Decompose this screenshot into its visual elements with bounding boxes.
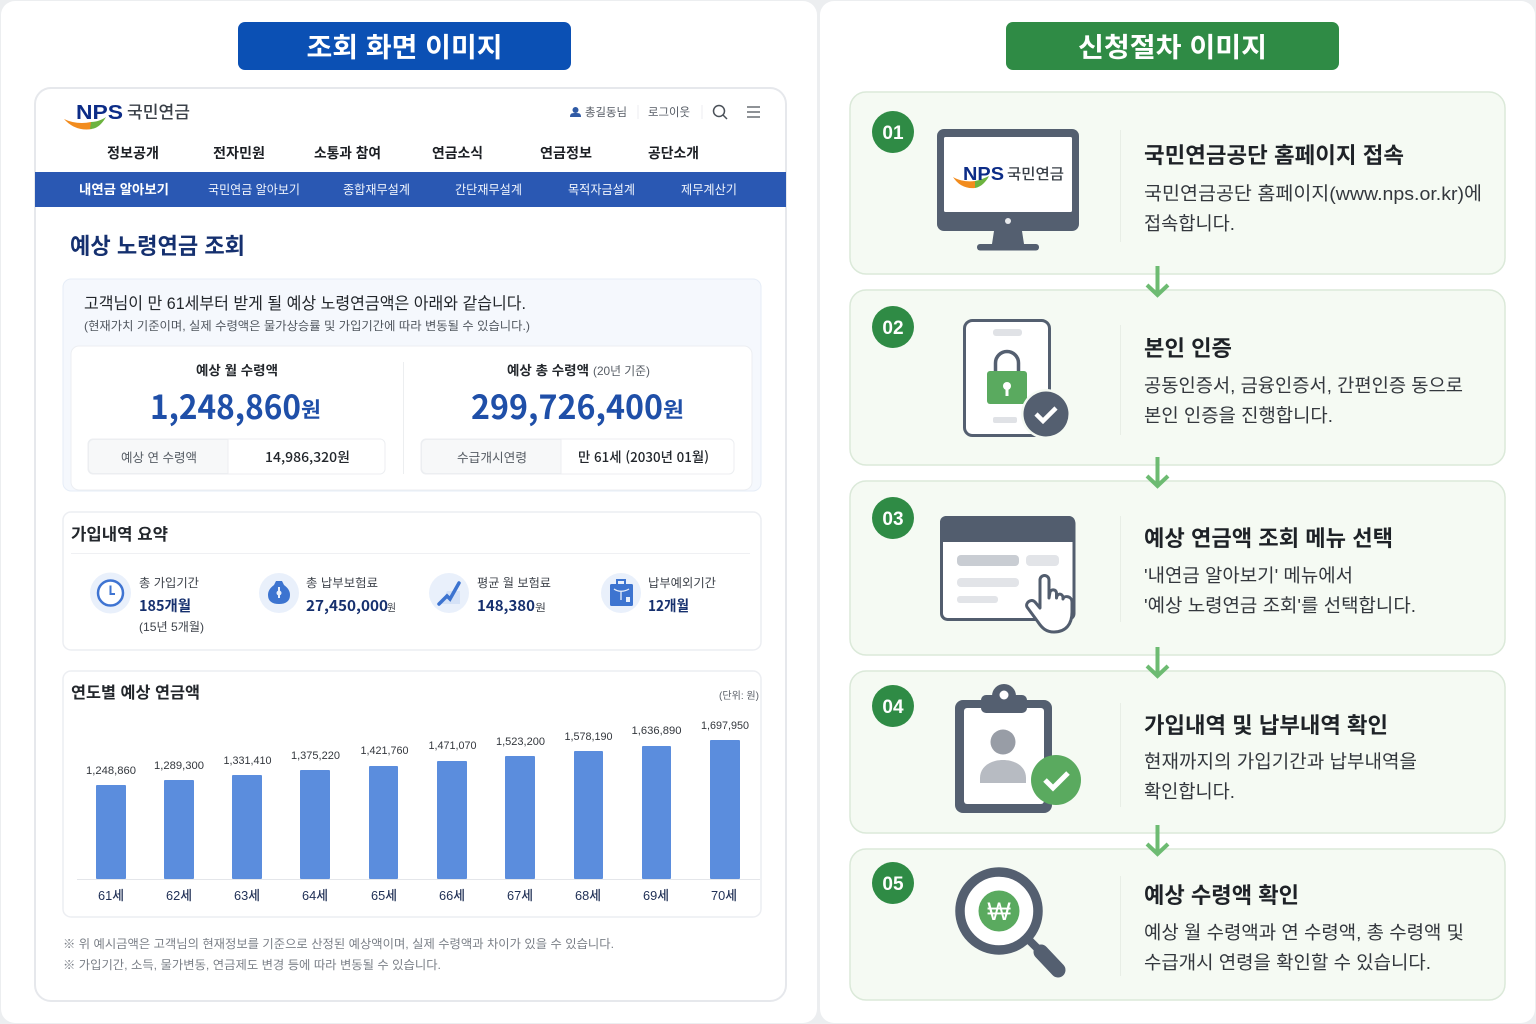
- browser window: [35, 88, 786, 1001]
- step 05: 예상 수령액 확인: [1144, 883, 1299, 908]
- panel: query screen: [1, 1, 817, 1023]
- item: exemption period: 12개월: [648, 595, 689, 616]
- bar chart: yearly pension: 67세: [507, 888, 533, 903]
- bar chart: yearly pension: 68세: [575, 888, 601, 903]
- top utility links: 로그이웃: [648, 106, 690, 119]
- icon: phone lock: [964, 320, 1071, 439]
- item: total premium: 총 납부보험료: [306, 576, 378, 590]
- footnotes: [63, 937, 614, 972]
- total amount: [421, 363, 734, 474]
- arrow 1: [1147, 266, 1168, 295]
- step 01: 01: [882, 123, 904, 144]
- bar chart: yearly pension: 1,636,890: [632, 725, 682, 737]
- total amount: 예상 총 수령액: [507, 363, 589, 378]
- item: total premium: 원: [387, 602, 396, 614]
- bar chart: yearly pension: 연도별 예상 연금액: [71, 684, 200, 702]
- top utility links: 총길동님: [585, 106, 627, 119]
- icon: clipboard check: [955, 684, 1081, 813]
- panel: application procedure: [820, 1, 1535, 1023]
- step 05: 예상 월 수령액과 연 수령액, 총 수령액 및: [1144, 922, 1464, 943]
- sub navigation bar: 간단재무설계: [455, 183, 522, 197]
- membership summary card: [63, 512, 761, 650]
- icon: monitor: NPS: [963, 164, 1004, 184]
- step 02: [850, 290, 1505, 465]
- bar chart: yearly pension: 1,697,950: [701, 720, 749, 732]
- total amount: (20년 기준): [593, 364, 650, 378]
- main navigation: 연금소식: [432, 145, 483, 161]
- icon: magnifier won: ₩: [987, 898, 1011, 926]
- bar chart: yearly pension: (단위: 원): [719, 689, 759, 702]
- bar chart: yearly pension: 1,248,860: [86, 765, 136, 777]
- monthly amount: 예상 연 수령액: [121, 451, 197, 465]
- step 03: '예상 노령연금 조회'를 선택합니다.: [1144, 595, 1416, 616]
- item: average premium: 평균 월 보험료: [477, 576, 551, 590]
- item: total premium: 27,450,000: [306, 595, 388, 616]
- main navigation: 소통과 참여: [314, 145, 381, 161]
- icon: menu click: [940, 516, 1075, 632]
- step 05: 수급개시 연령을 확인할 수 있습니다.: [1144, 952, 1431, 973]
- main navigation: 연금정보: [540, 145, 592, 161]
- arrow 4: [1147, 825, 1168, 854]
- heading: application procedure: [1006, 22, 1339, 70]
- bar chart: yearly pension: 64세: [302, 888, 328, 903]
- monthly amount: 예상 월 수령액: [196, 363, 278, 378]
- step 01: 국민연금공단 홈페이지 접속: [1144, 143, 1404, 168]
- total amount: 수급개시연령: [457, 451, 527, 465]
- total amount: 만 61세 (2030년 01월): [578, 446, 709, 466]
- step 04: 04: [882, 697, 904, 718]
- heading: application procedure: 신청절차 이미지: [1078, 33, 1267, 63]
- logo: NPS: NPS: [76, 102, 123, 124]
- bar chart: yearly pension: 1,578,190: [564, 731, 612, 743]
- main navigation: 정보공개: [107, 145, 159, 161]
- bar chart: yearly pension: 63세: [234, 888, 260, 903]
- step 04: 현재까지의 가입기간과 납부내역을: [1144, 751, 1417, 772]
- step 05: [850, 849, 1505, 1000]
- step 05: 05: [882, 874, 904, 895]
- sub navigation bar: 목적자금설계: [568, 183, 635, 197]
- bar chart: yearly pension: 1,375,220: [291, 750, 340, 762]
- membership summary card: 가입내역 요약: [71, 525, 168, 544]
- step 04: 확인합니다.: [1144, 781, 1235, 802]
- monthly amount: 원: [301, 399, 321, 422]
- step 02: 공동인증서, 금융인증서, 간편인증 동으로: [1144, 375, 1463, 396]
- page title: 예상 노령연금 조회: [70, 234, 245, 259]
- item: total period: 185개월: [139, 595, 191, 616]
- result summary box: [63, 279, 761, 491]
- icon: magnifier won: [960, 872, 1058, 970]
- logo: NPS: 국민연금: [127, 103, 190, 122]
- icon: monitor: [937, 129, 1079, 250]
- sub navigation bar: 국민연금 알아보기: [208, 183, 300, 197]
- bar chart: yearly pension: 65세: [371, 888, 397, 903]
- monthly amount: 14,986,320원: [265, 446, 350, 466]
- result summary box: 고객님이 만 61세부터 받게 될 예상 노령연금액은 아래와 같습니다.: [84, 294, 526, 313]
- item: exemption period: [601, 573, 716, 616]
- total amount: 원: [663, 399, 684, 422]
- bar chart: yearly pension: 70세: [711, 888, 737, 903]
- step 04: [850, 671, 1505, 833]
- bar chart: yearly pension: 1,523,200: [496, 736, 545, 748]
- arrow 2: [1147, 457, 1168, 486]
- sub navigation bar: [35, 172, 786, 207]
- step 03: 예상 연금액 조회 메뉴 선택: [1144, 526, 1393, 551]
- icon: monitor: 국민연금: [1007, 166, 1064, 183]
- sub navigation bar: 제무계산기: [681, 183, 737, 197]
- sub navigation bar: 종합재무설계: [343, 183, 410, 197]
- step 02: 본인 인증을 진행합니다.: [1144, 405, 1333, 426]
- item: total period: [90, 572, 204, 634]
- bar chart: yearly pension: 1,471,070: [428, 740, 476, 752]
- arrow 3: [1147, 647, 1168, 676]
- item: average premium: 원: [535, 602, 546, 614]
- footnotes: ※ 위 예시금액은 고객님의 현재정보를 기준으로 산정된 예상액이며, 실제 수령액과 차이가 있을 수 있습니다.: [63, 937, 614, 951]
- heading: query screen: 조회 화면 이미지: [306, 33, 502, 63]
- top utility links: [570, 105, 760, 119]
- step 01: [850, 92, 1505, 274]
- monthly amount: 1,248,860: [150, 381, 301, 429]
- total amount: 299,726,400: [471, 381, 663, 429]
- main navigation: 전자민원: [213, 145, 265, 161]
- heading: query screen: [238, 22, 571, 70]
- main navigation: [107, 145, 699, 161]
- step 02: 02: [882, 318, 904, 339]
- step 01: 국민연금공단 홈페이지(www.nps.or.kr)에: [1144, 183, 1482, 204]
- sub navigation bar: 내연금 알아보기: [79, 182, 169, 197]
- bar chart: yearly pension: 1,421,760: [360, 745, 408, 757]
- bar chart: yearly pension: 61세: [98, 888, 124, 903]
- bar chart: yearly pension: 1,331,410: [224, 755, 272, 767]
- step 01: 접속합니다.: [1144, 213, 1235, 234]
- main navigation: 공단소개: [648, 145, 699, 161]
- item: average premium: [429, 573, 551, 616]
- step 03: 03: [882, 509, 904, 530]
- step 04: 가입내역 및 납부내역 확인: [1144, 713, 1388, 738]
- item: exemption period: 납부예외기간: [648, 576, 716, 590]
- step 03: [850, 481, 1505, 655]
- item: total period: (15년 5개월): [139, 620, 204, 634]
- item: total premium: [259, 573, 396, 616]
- bar chart: yearly pension: 66세: [439, 888, 465, 903]
- step 02: 본인 인증: [1144, 336, 1232, 361]
- footnotes: ※ 가입기간, 소득, 물가변동, 연금제도 변경 등에 따라 변동될 수 있습니다.: [63, 958, 441, 972]
- item: average premium: 148,380: [477, 595, 535, 616]
- bar chart: yearly pension: 69세: [643, 888, 669, 903]
- item: total period: 총 가입기간: [139, 576, 199, 590]
- monthly amount: [88, 363, 385, 474]
- step 03: '내연금 알아보기' 메뉴에서: [1144, 565, 1353, 586]
- bar chart: yearly pension: 62세: [166, 888, 192, 903]
- bar chart: yearly pension: 1,289,300: [154, 760, 204, 772]
- result summary box: (현재가치 기준이며, 실제 수령액은 물가상승률 및 가입기간에 따라 변동될 수 있습니다.): [84, 319, 530, 333]
- bar chart: yearly pension: [63, 671, 761, 917]
- logo: NPS: [64, 102, 190, 130]
